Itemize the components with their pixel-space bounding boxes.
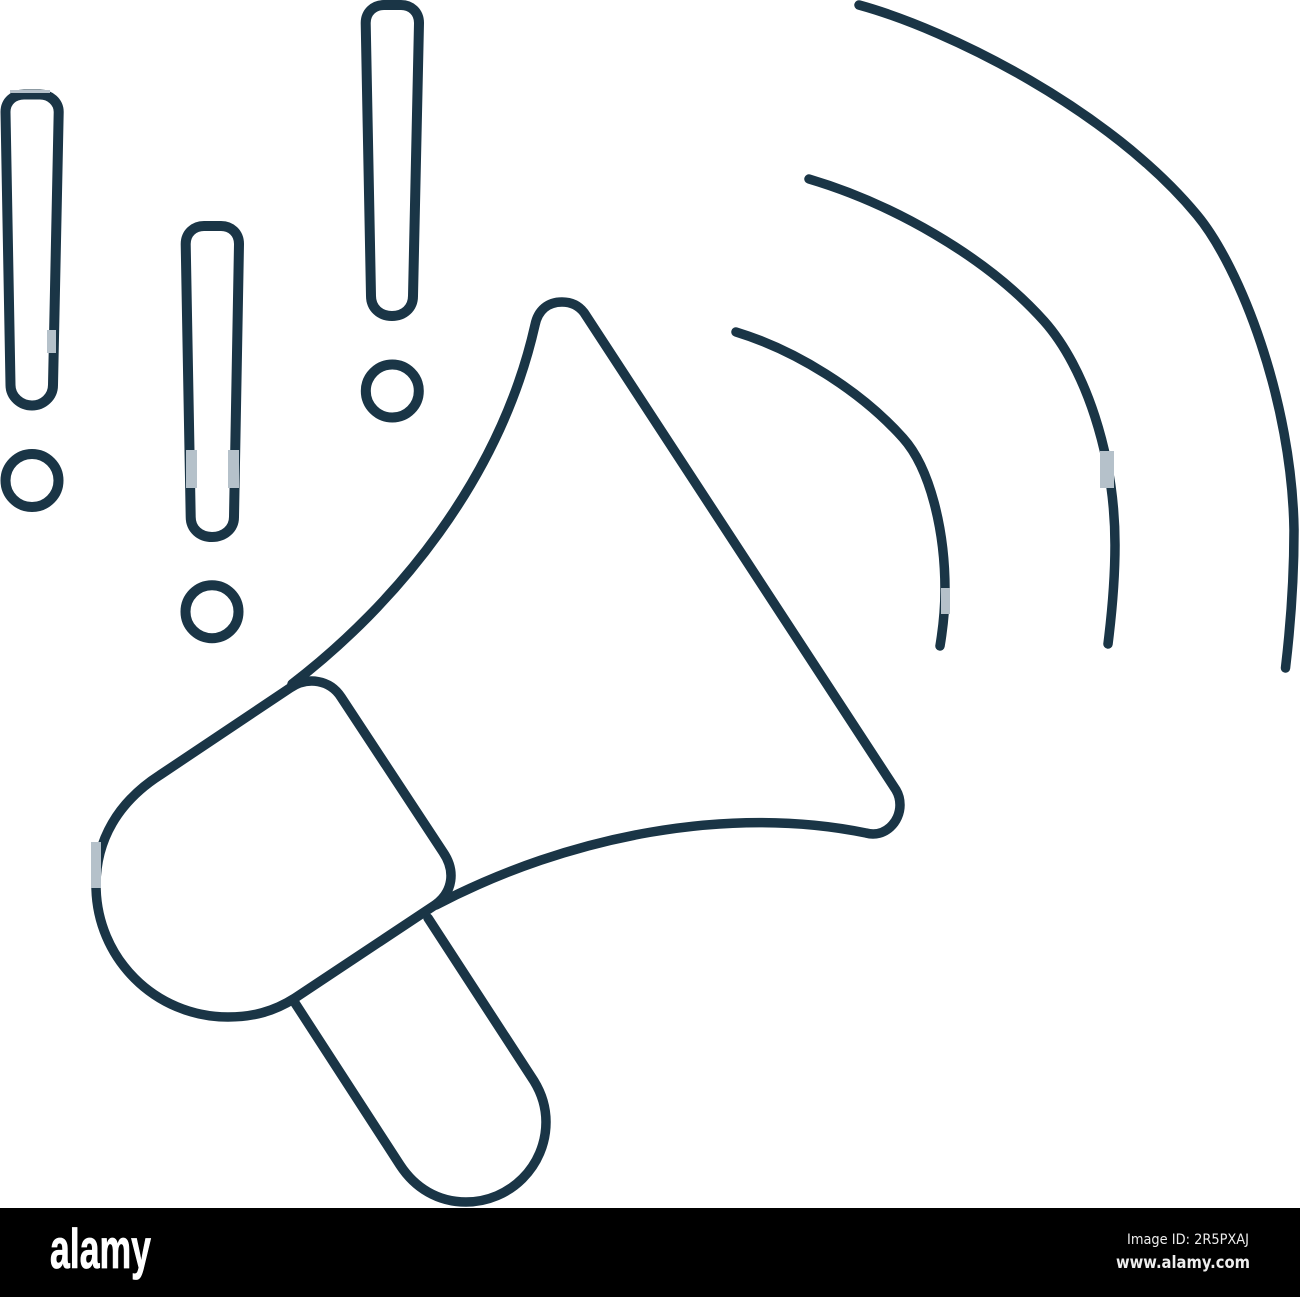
footer bar: [0, 1208, 1300, 1297]
megaphone horn: [292, 302, 900, 905]
sound wave: large: [859, 5, 1294, 668]
icon: exclamation mark left: [6, 94, 59, 507]
website url: www.alamy.com: [1116, 1253, 1250, 1273]
alamy logo wordmark: alamy: [50, 1217, 151, 1280]
sound wave: medium: [809, 179, 1115, 644]
sound wave: small: [736, 332, 945, 646]
image id: Image ID: 2R5PXAJ: [1127, 1232, 1249, 1248]
icon: exclamation mark right: [366, 5, 419, 418]
watermark remnants: [10, 90, 1114, 888]
megaphone handle: [295, 918, 546, 1202]
icon: megaphone: [96, 302, 900, 1202]
megaphone body: [96, 681, 451, 1017]
icon: exclamation mark middle: [186, 226, 239, 638]
